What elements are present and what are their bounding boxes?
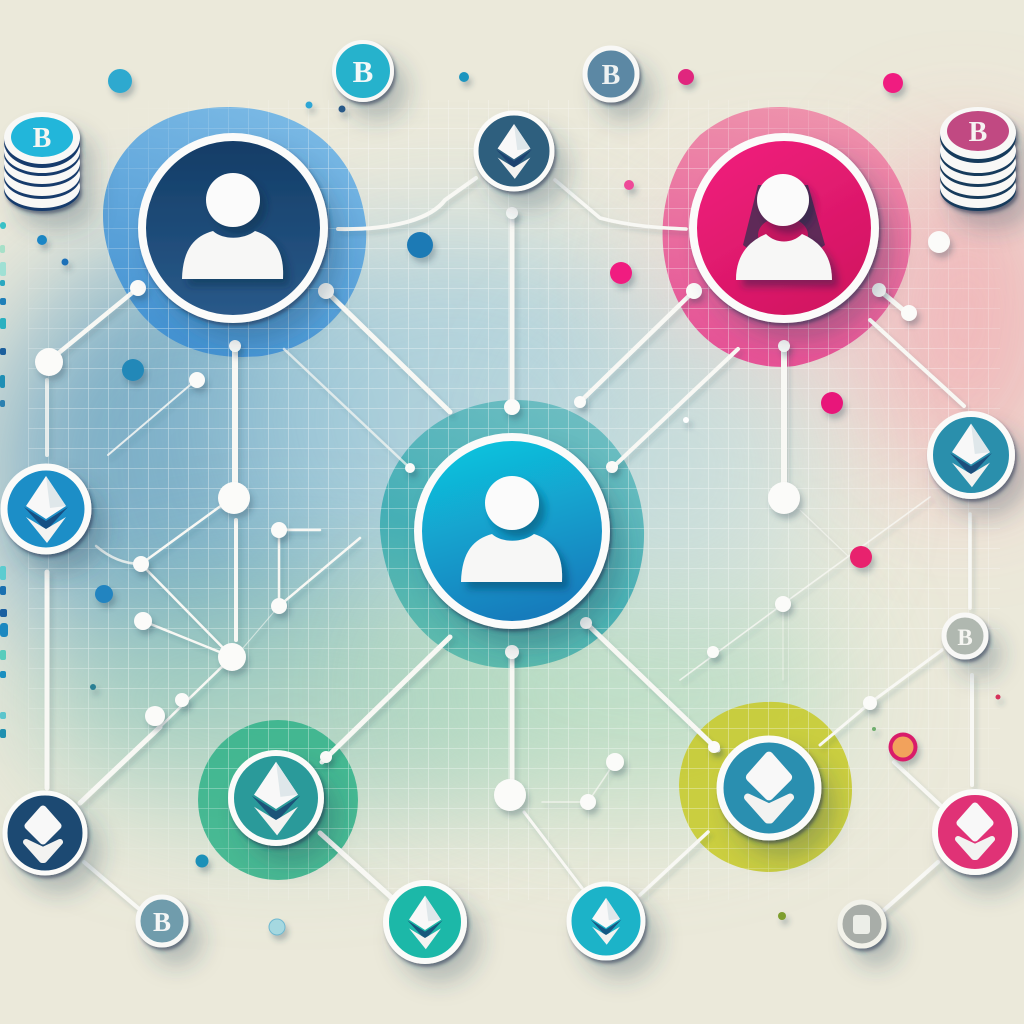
- coin: right small token: [944, 615, 986, 657]
- coin: bottom right grey token: [840, 902, 884, 946]
- halo: teal user: [380, 400, 644, 668]
- coin: top centre-right token: [585, 48, 637, 100]
- left edge data ticks: [0, 222, 8, 738]
- token: bottom centre-left: [386, 883, 464, 961]
- token: bottom left navy: [5, 793, 85, 873]
- token: bottom centre: [569, 884, 643, 958]
- halo: yellow token: [679, 702, 852, 872]
- coin: top left stack: B: [33, 123, 51, 154]
- connector lines: [47, 178, 972, 910]
- junction nodes: [35, 207, 950, 811]
- node: pink user avatar: [693, 137, 875, 319]
- token: top centre: [476, 113, 552, 189]
- coin: top centre-left token: B: [353, 54, 373, 89]
- token: left blue: [4, 467, 88, 551]
- background grid: [28, 100, 1000, 900]
- halo: blue user: [103, 107, 366, 357]
- scattered dots: [37, 69, 1000, 935]
- halo: pink user: [663, 107, 911, 367]
- token: green halo: [231, 753, 321, 843]
- token: yellow halo: [720, 739, 818, 837]
- coin: top right stack: B: [969, 117, 987, 148]
- coin: top centre-right token: B: [602, 60, 620, 91]
- coin: top left stack: [4, 112, 80, 211]
- coin: bottom left token: [138, 897, 186, 945]
- node: central teal user avatar: [418, 437, 606, 625]
- halo: green token: [198, 720, 358, 880]
- coin: bottom left token: B: [153, 907, 171, 937]
- node: blue user avatar: [142, 137, 324, 319]
- coin: top right stack: [940, 107, 1016, 211]
- icon: orange and pink status dot: [888, 732, 918, 762]
- token: bottom right pink: [935, 792, 1015, 872]
- token: right teal: [930, 414, 1012, 496]
- coin: top centre-left token: [334, 42, 392, 100]
- coin: right small token: B: [957, 625, 973, 650]
